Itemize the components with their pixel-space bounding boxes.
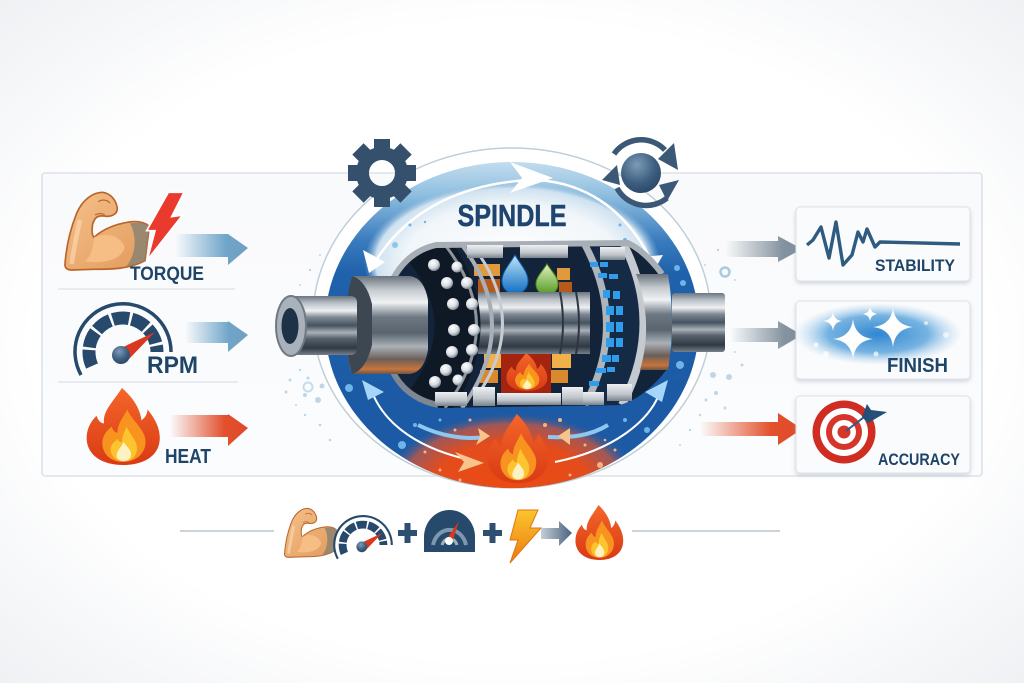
summary equation xyxy=(180,505,780,563)
arrow: to heat xyxy=(541,521,572,546)
card: finish xyxy=(794,301,970,379)
icon: result flame xyxy=(575,505,623,560)
icon: spindle flame xyxy=(506,353,547,391)
panel: spindle disc xyxy=(302,147,731,489)
arrow: accuracy xyxy=(700,413,802,445)
label: torque: TORQUE xyxy=(130,264,204,285)
ember specks xyxy=(424,418,616,482)
glow and sparkles xyxy=(794,303,962,365)
center shaft xyxy=(478,292,590,354)
icon: bottom flame xyxy=(488,414,548,483)
title: SPINDLE xyxy=(458,198,566,233)
icon: target xyxy=(812,400,887,464)
icon: gear xyxy=(348,139,416,207)
icon: dome gauge xyxy=(424,510,475,552)
icon: green oil drop xyxy=(536,264,558,295)
heat glow at disc base xyxy=(400,415,624,488)
spindle cutaway xyxy=(276,243,725,408)
card: accuracy xyxy=(796,396,970,473)
housing xyxy=(388,243,668,408)
icon: lightning bolt xyxy=(510,510,541,563)
panel: outputs xyxy=(700,207,970,473)
icon: small rpm gauge xyxy=(334,516,392,559)
bearing balls xyxy=(428,259,480,388)
arrows: cooling flow xyxy=(372,392,660,462)
plus xyxy=(398,523,417,543)
ring accent right xyxy=(720,268,730,276)
housing bottom plates xyxy=(392,370,632,406)
right collar and shaft xyxy=(636,274,725,370)
arrow: heat xyxy=(170,414,248,446)
label: accuracy: ACCURACY xyxy=(878,451,960,469)
card: stability xyxy=(796,207,970,281)
label: heat: HEAT xyxy=(165,446,211,468)
inner light region xyxy=(364,182,660,342)
plus xyxy=(483,523,502,543)
left collar and nose xyxy=(276,276,428,374)
arrow: torque xyxy=(175,234,248,265)
label: stability: STABILITY xyxy=(875,256,956,275)
chart: vibration wave xyxy=(807,222,960,265)
label: finish: FINISH xyxy=(887,354,948,377)
arrow: top circulation xyxy=(363,162,663,274)
speckles around the disc xyxy=(284,249,744,446)
bearing band xyxy=(425,245,503,408)
label: rpm: RPM xyxy=(147,352,198,379)
heat chamber xyxy=(501,352,551,393)
panel: main frame xyxy=(42,173,982,476)
icon: small muscle xyxy=(285,508,336,557)
panel: inputs xyxy=(58,192,248,468)
icon: flame xyxy=(87,388,160,465)
arrow: stability xyxy=(725,236,802,262)
right bearing and blue cells xyxy=(585,245,644,405)
ring accent left xyxy=(304,382,312,392)
housing top plates xyxy=(390,243,662,285)
icon: flexed muscle and lightning xyxy=(65,192,184,270)
disc sparkles xyxy=(345,221,686,449)
icon: rotation xyxy=(602,140,679,205)
icon: rpm gauge xyxy=(75,304,171,375)
orange blocks xyxy=(474,264,572,383)
icon: blue oil drop xyxy=(502,255,528,294)
disc body xyxy=(325,162,699,488)
arrowheads: cooling and heat xyxy=(362,380,668,472)
arrow: finish xyxy=(730,321,802,349)
arrow: rpm xyxy=(185,321,248,352)
